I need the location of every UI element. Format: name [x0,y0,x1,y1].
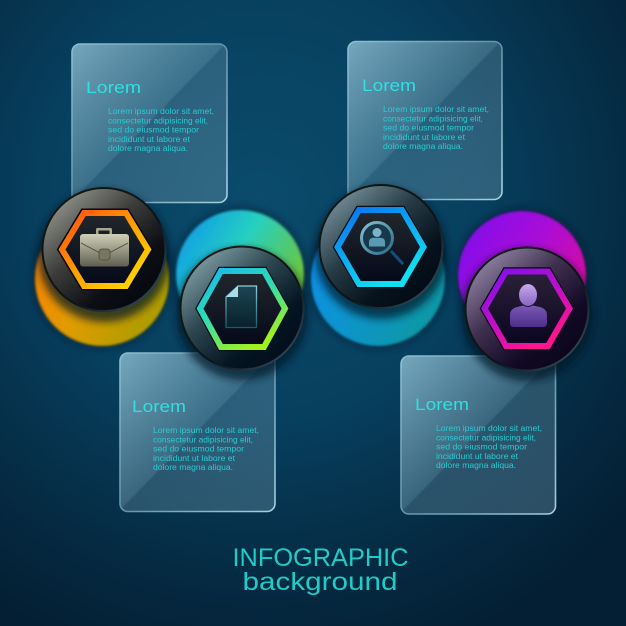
card 4 body text: incididunt ut labore et [436,452,519,461]
card 1 body text: dolore magna aliqua. [108,144,188,153]
card 3 body text: consectetur adipisicing elit, [153,435,253,444]
icon node 4: user [456,209,593,381]
card 4 body text: Lorem ipsum dolor sit amet, [436,424,542,433]
icon node 1: briefcase [33,188,171,348]
magnifier glyph [362,222,403,264]
card 1 body text: consectetur adipisicing elit, [108,116,208,125]
card 2 body text: incididunt ut labore et [383,133,466,142]
panel: glass card 4 [401,356,556,514]
document glyph [226,286,256,328]
user glyph [510,284,547,327]
title: background [242,568,398,596]
card 2 body text [383,105,489,151]
card 1 body text: incididunt ut labore et [108,135,191,144]
card 4 heading: Lorem [415,395,469,414]
card 4 body text [436,424,542,470]
card 2 body text: sed do eiusmod tempor [383,124,474,133]
card 2 body text: dolore magna aliqua. [383,142,463,151]
card 3 body text: incididunt ut labore et [153,454,236,463]
title [232,544,408,596]
card 1 body text: Lorem ipsum dolor sit amet, [108,107,214,116]
panel: glass card 2 [348,42,502,200]
card 2 body text: consectetur adipisicing elit, [383,114,483,123]
briefcase glyph [80,228,129,266]
card 1 body text [108,107,214,153]
panel: glass card 3 [120,353,275,512]
card 3 heading: Lorem [132,397,186,416]
card 4 body text: dolore magna aliqua. [436,461,516,470]
panel: glass card 1 [72,44,227,202]
card 4 body text: consectetur adipisicing elit, [436,433,536,442]
card 1 heading: Lorem [86,78,141,97]
card 3 body text [153,426,259,472]
card 3 body text: sed do eiusmod tempor [153,445,244,454]
card 3 body text: dolore magna aliqua. [153,463,233,472]
icon node 2: document [174,208,308,380]
card 1 body text: sed do eiusmod tempor [108,126,199,135]
icon node 3: magnifier person [309,185,447,348]
card 4 body text: sed do eiusmod tempor [436,443,527,452]
card 3 body text: Lorem ipsum dolor sit amet, [153,426,259,435]
card 2 heading: Lorem [362,76,416,95]
card 2 body text: Lorem ipsum dolor sit amet, [383,105,489,114]
title: INFOGRAPHIC [232,544,408,572]
